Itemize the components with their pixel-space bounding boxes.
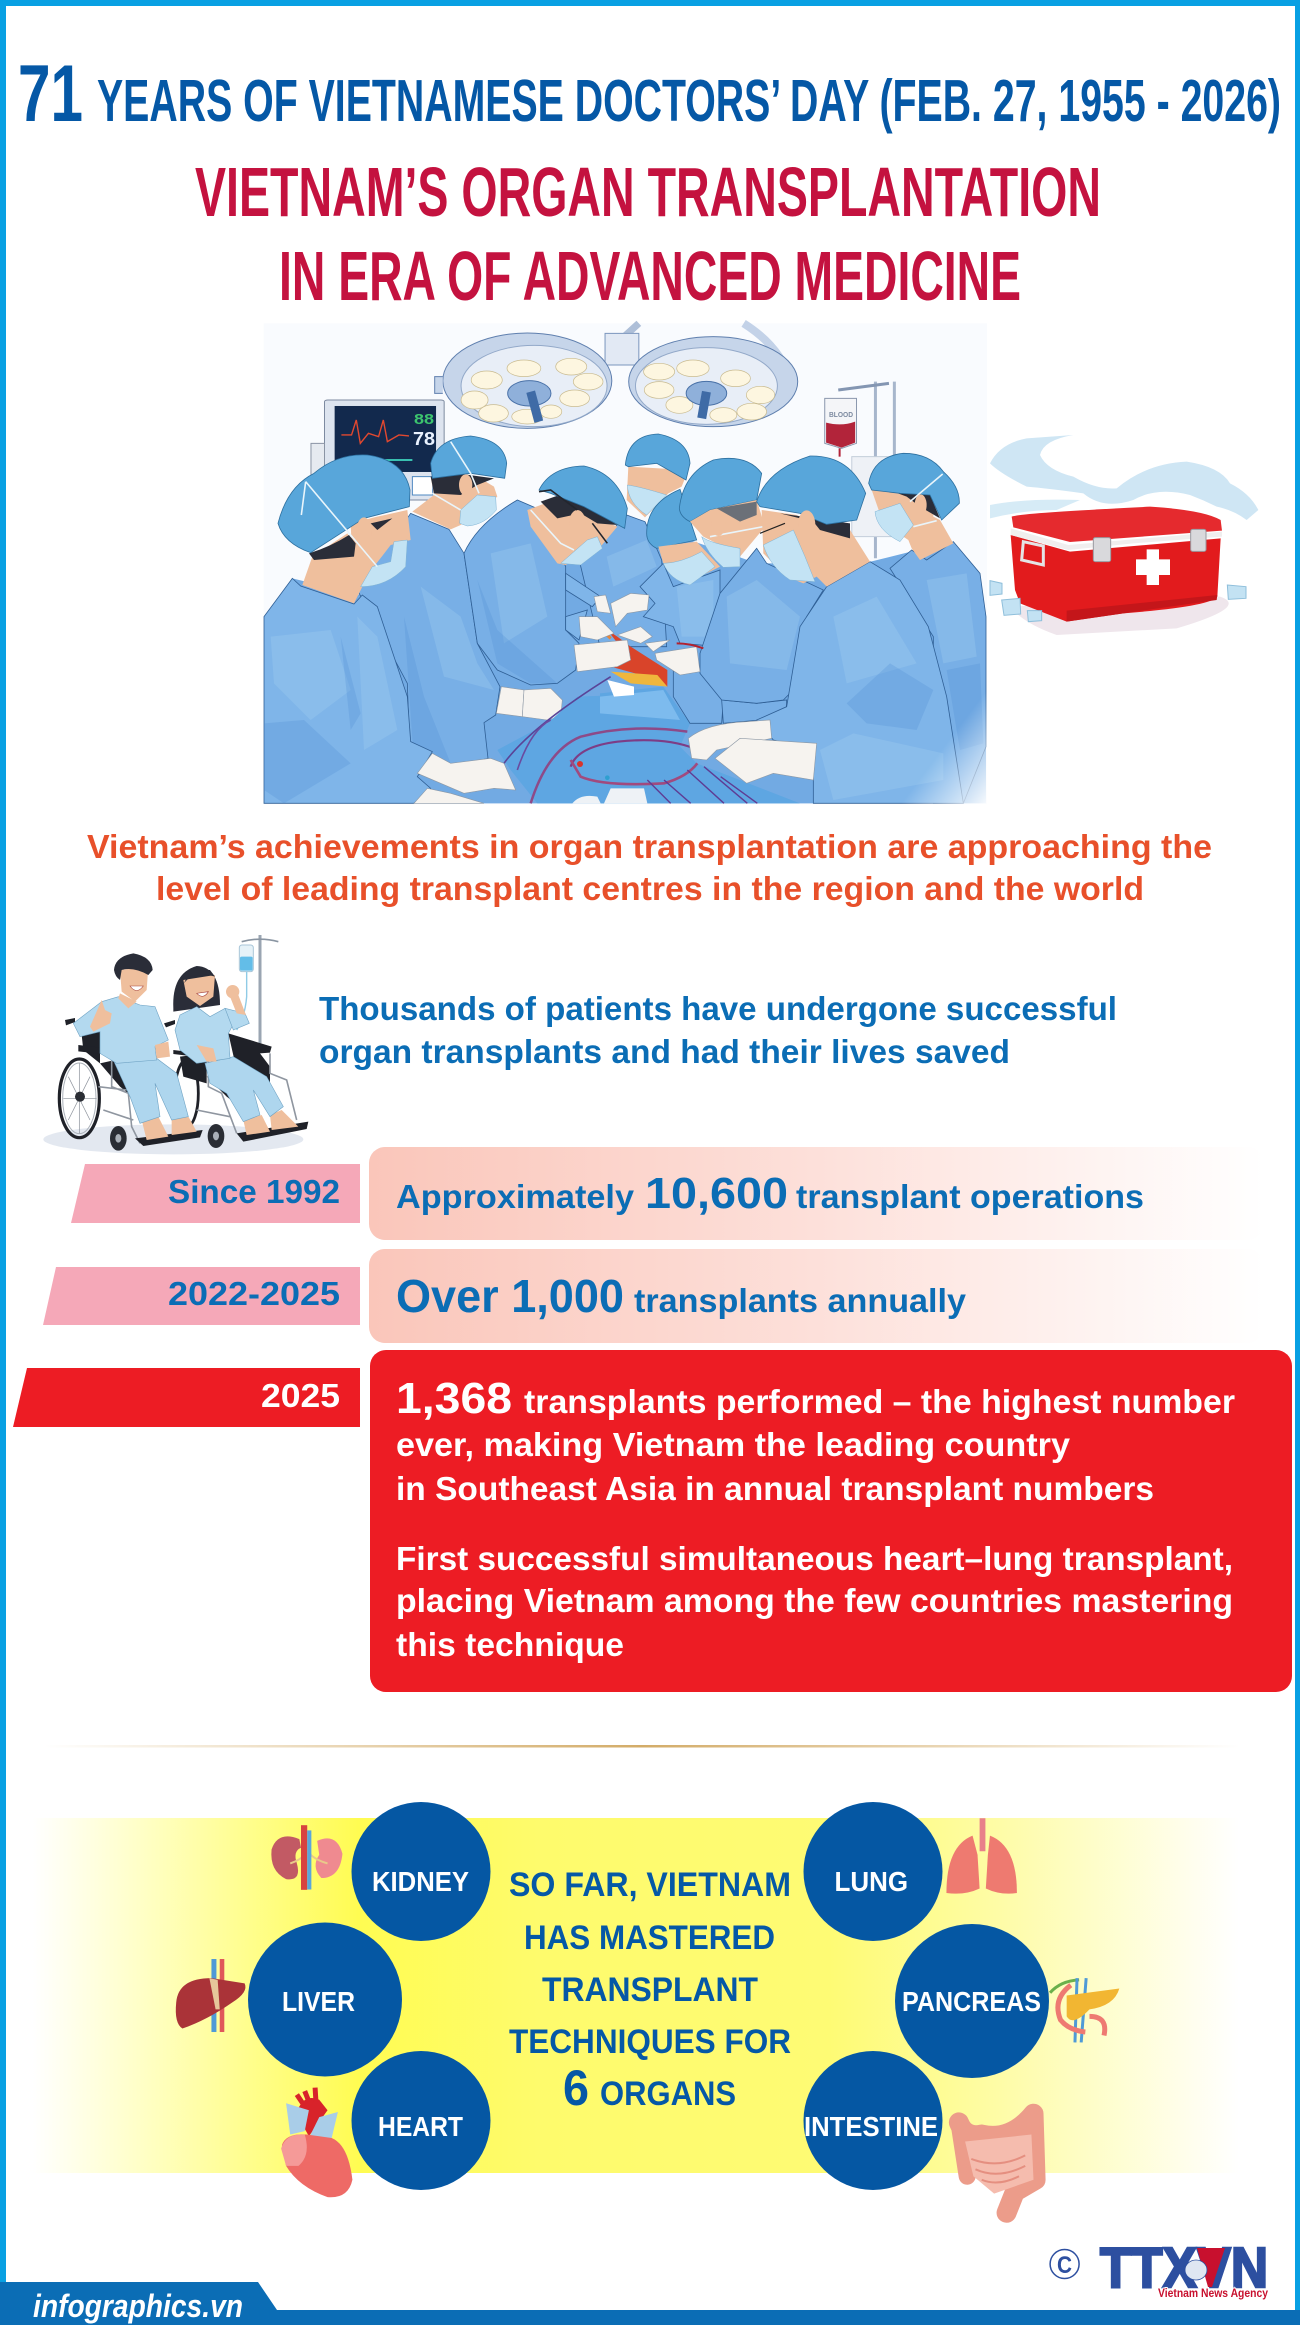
agency wordmark: TTXVN <box>1100 2236 1268 2300</box>
man's wheelchair <box>59 1018 203 1151</box>
icon: kidneys <box>271 1825 342 1890</box>
title line: 71 years: 71 <box>18 49 83 139</box>
patients statement: Thousands of patients have undergone successful <box>319 990 1117 1027</box>
monitor readings: 88 <box>414 411 434 428</box>
icon: intestine <box>959 2114 1036 2213</box>
patients statement: organ transplants and had their lives saved <box>319 1033 1010 1070</box>
front left surgeon <box>264 455 516 803</box>
small surgeon behind table <box>640 489 720 647</box>
statistic pill: Over 1,000 <box>396 1270 624 1322</box>
statistic pill: 10,600 <box>645 1169 788 1218</box>
central statement: HAS MASTERED <box>524 1919 775 1957</box>
date ribbon: Since 1992 <box>168 1173 340 1210</box>
surgeon with glasses, centre right <box>645 458 823 737</box>
far right surgeon <box>869 453 986 803</box>
copyright mark <box>1050 2250 1079 2279</box>
centre left surgeon <box>464 466 627 685</box>
organ circle: intestine: INTESTINE <box>804 2111 938 2142</box>
date ribbon <box>71 1164 360 1223</box>
central statement <box>509 1866 791 2116</box>
yellow band <box>33 1818 1239 2173</box>
icon: pancreas <box>1050 1978 1119 2042</box>
achievements panel <box>370 1350 1292 1692</box>
title block <box>18 49 1281 315</box>
date ribbon: 2022-2025 <box>168 1275 340 1312</box>
agency wordmark: Vietnam News Agency <box>1158 2286 1268 2300</box>
operating table drape right <box>600 687 800 803</box>
bottom right fade <box>900 690 987 805</box>
achievements panel: First successful simultaneous heart–lung transplant, <box>396 1540 1233 1577</box>
organ circle: pancreas <box>895 1924 1049 2078</box>
logo: Vietnam News Agency <box>1050 2236 1268 2300</box>
statistic pill <box>369 1249 1264 1343</box>
central statement: TECHNIQUES FOR <box>509 2023 791 2061</box>
right group back layer: back surgeon and far right surgeon <box>580 434 986 803</box>
monitor readings: BLOOD <box>829 412 853 419</box>
organ circle: pancreas: PANCREAS <box>902 1986 1041 2017</box>
organ circle: liver <box>248 1922 402 2076</box>
operating room background, lamps, monitor and blood bag <box>264 323 987 804</box>
central statement: ORGANS <box>600 2075 736 2113</box>
central statement: 6 <box>563 2060 589 2116</box>
achievements panel: 1,368 <box>396 1374 512 1423</box>
copyright mark: C <box>1057 2252 1072 2279</box>
statistic pill: Approximately <box>396 1178 635 1215</box>
statistic pill: transplants annually <box>634 1282 967 1319</box>
timeline row: 2022-2025 <box>43 1249 1264 1343</box>
icon: two happy patients in wheelchairs with IV pole <box>43 935 308 1154</box>
central statement: TRANSPLANT <box>542 1971 758 2009</box>
main heading <box>195 153 1101 315</box>
base of surgical gowns <box>264 500 986 803</box>
subtitle <box>87 829 1212 908</box>
organ circle: heart: HEART <box>378 2111 463 2142</box>
subtitle: level of leading transplant centres in the region and the world <box>156 871 1144 908</box>
statistic pill <box>369 1147 1264 1240</box>
achievements panel: placing Vietnam among the few countries mastering <box>396 1582 1233 1619</box>
achievements panel: transplants performed – the highest number <box>524 1383 1235 1420</box>
panel: six organs <box>33 1802 1239 2213</box>
footer bar <box>0 2282 1300 2325</box>
website credit: infographics.vn <box>33 2288 243 2324</box>
statistic pill: transplant operations <box>796 1178 1144 1215</box>
date ribbon: 2025 <box>261 1377 340 1414</box>
achievements panel: in Southeast Asia in annual transplant numbers <box>396 1470 1154 1507</box>
date ribbon <box>43 1267 360 1325</box>
monitor readings <box>413 411 853 449</box>
subtitle: Vietnam’s achievements in organ transplantation are approaching the <box>87 829 1212 866</box>
man <box>73 953 197 1140</box>
monitor readings: 78 <box>413 429 435 449</box>
organ circle: heart <box>352 2051 490 2190</box>
organ circle: kidney <box>352 1802 490 1941</box>
organ circle: lung <box>804 1802 942 1941</box>
illustration: surgical team in operating room <box>264 323 987 805</box>
achievements panel: ever, making Vietnam the leading country <box>396 1426 1071 1463</box>
second surgeon from left <box>357 436 562 777</box>
organ circle: lung: LUNG <box>834 1866 908 1897</box>
organ circle: intestine <box>804 2051 942 2190</box>
back surgeon <box>580 434 690 647</box>
left group back layer: two left surgeons <box>357 436 667 803</box>
icon: liver <box>176 1959 245 2032</box>
woman <box>173 966 298 1135</box>
icon: heart <box>281 2088 352 2197</box>
tubes, surgical site and gloves <box>504 593 757 803</box>
operating table drape left <box>497 693 667 803</box>
right surgeons in front <box>645 456 987 805</box>
woman's wheelchair <box>164 1020 308 1148</box>
timeline row: since 1992 <box>71 1147 1264 1240</box>
date ribbon <box>13 1368 360 1427</box>
central statement: SO FAR, VIETNAM <box>509 1866 791 1904</box>
organ circle: kidney: KIDNEY <box>372 1866 469 1897</box>
large front right surgeon <box>688 456 963 803</box>
organ circle: liver: LIVER <box>282 1986 355 2017</box>
title line: 71 years <box>18 49 1281 139</box>
timeline row: 2025 <box>13 1350 1292 1692</box>
patients statement <box>319 990 1117 1070</box>
icon: lungs <box>946 1818 1017 1894</box>
achievements panel: this technique <box>396 1626 624 1663</box>
illustration: red organ transport cooler <box>990 435 1258 635</box>
